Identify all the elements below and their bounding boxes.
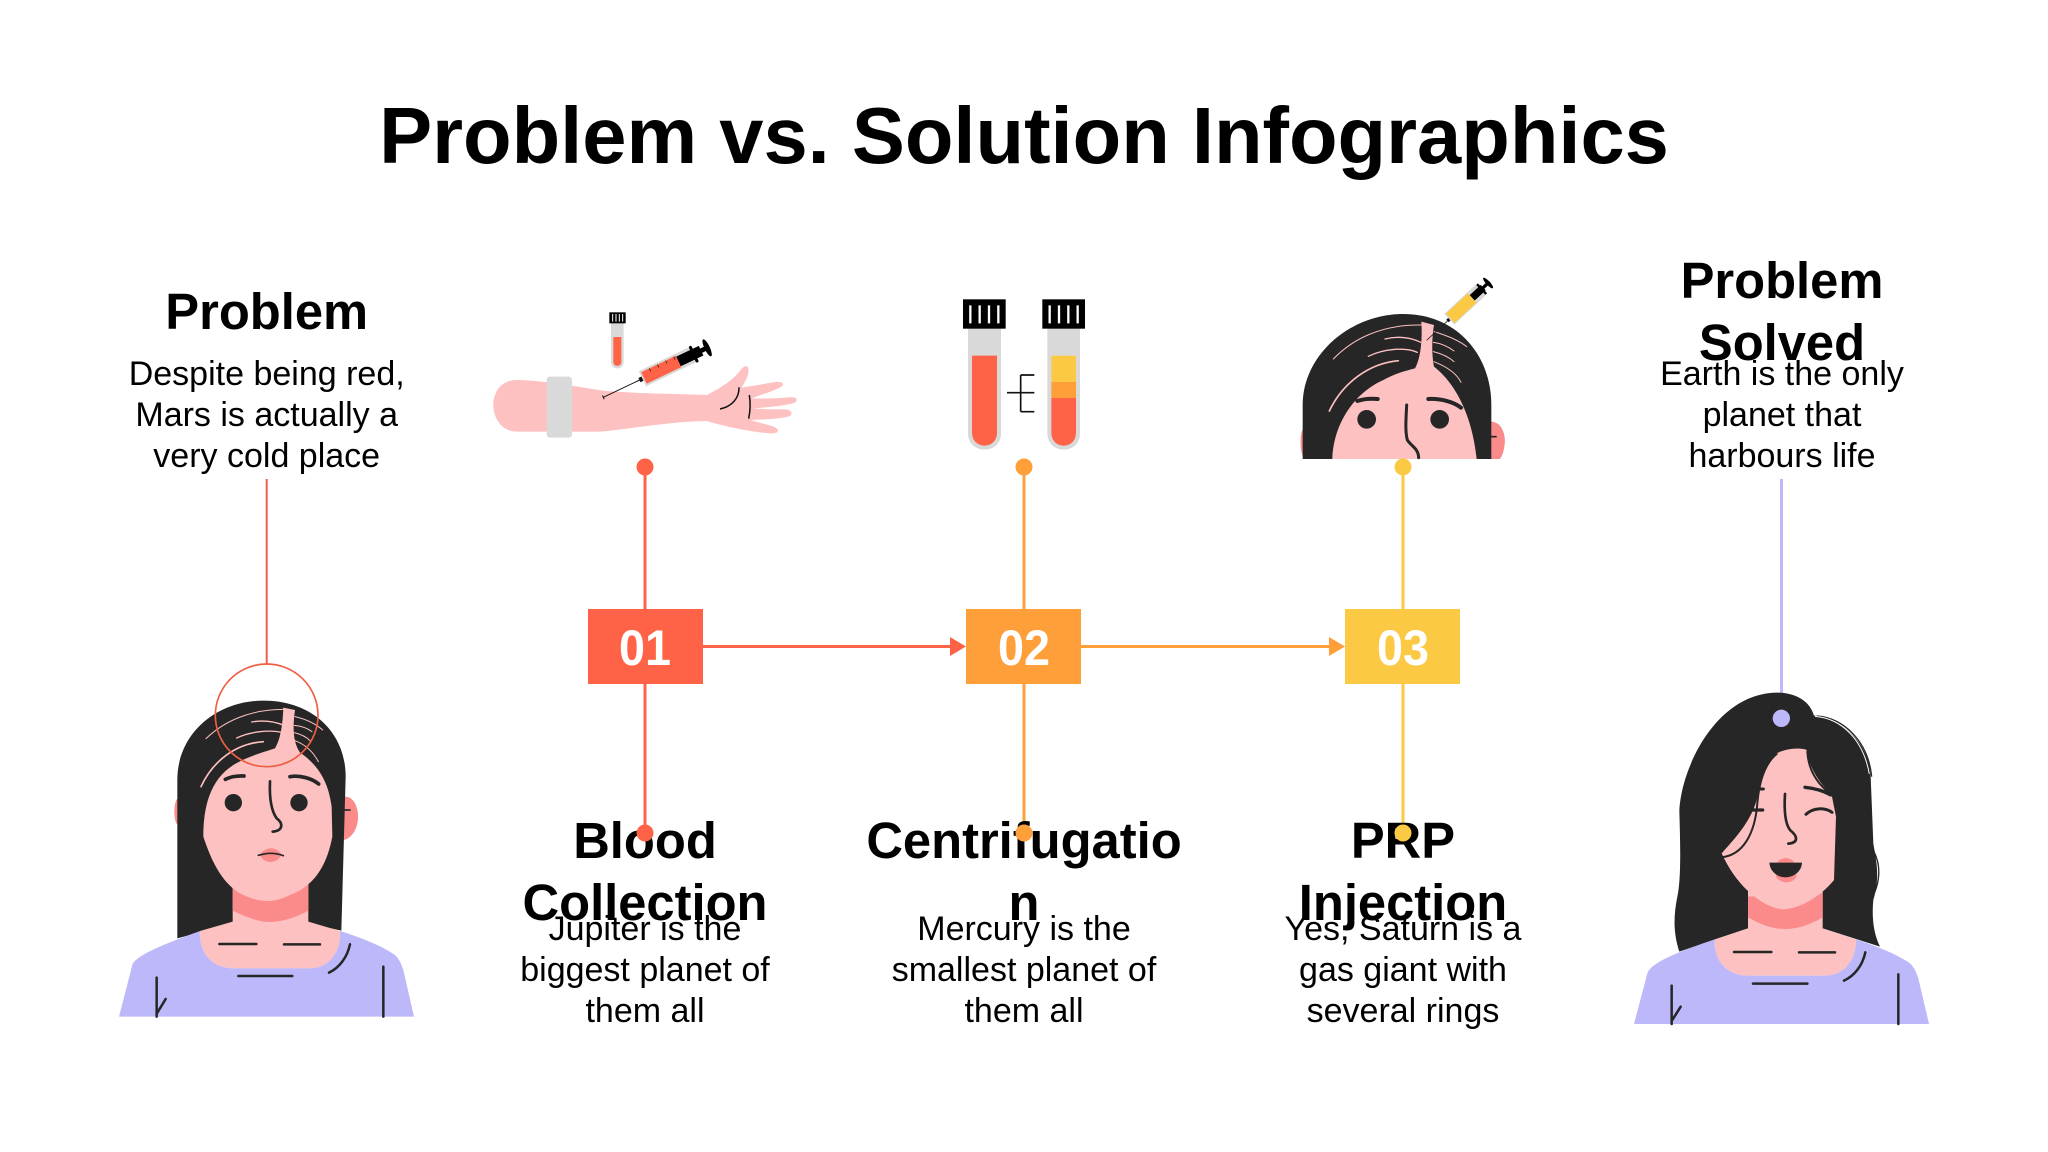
connector: solved line xyxy=(1780,479,1783,718)
syringe xyxy=(1422,276,1495,346)
text block: blood collection: biggest planet of xyxy=(520,951,770,989)
eyebrows xyxy=(1753,784,1763,793)
text block: problem xyxy=(129,283,405,475)
text block: problem solved: Earth is the only xyxy=(1660,355,1904,393)
separation bracket xyxy=(1007,375,1034,412)
eyes xyxy=(1357,410,1376,429)
left tube xyxy=(963,299,1006,450)
text block: problem solved: harbours life xyxy=(1688,437,1876,475)
eyebrows xyxy=(225,776,244,779)
connector: step 1 vertical xyxy=(644,466,646,833)
text block: problem solved xyxy=(1660,252,1904,475)
tourniquet xyxy=(547,377,572,438)
hair outline xyxy=(1817,716,1872,777)
hair strands xyxy=(201,709,323,787)
text block: blood collection: Jupiter is the xyxy=(549,910,741,948)
step badge 02 xyxy=(966,609,1081,684)
syringe xyxy=(599,338,714,406)
text block: centrifugation: Mercury is the xyxy=(917,910,1131,948)
panel: centrifugation illustration xyxy=(963,299,1085,450)
hair xyxy=(1303,314,1491,459)
text block: PRP injection: gas giant with xyxy=(1299,951,1507,989)
step badge 01: 01 xyxy=(619,620,671,676)
dot: step 3 bottom xyxy=(1394,824,1412,842)
collar and shirt lines xyxy=(157,944,383,1017)
panel: blood collection illustration xyxy=(493,312,797,438)
neck shadow xyxy=(233,883,308,922)
right tube xyxy=(1042,299,1085,450)
text block: problem solved: planet that xyxy=(1703,396,1862,434)
test tube xyxy=(609,312,626,368)
mouth xyxy=(260,848,282,862)
arrow: step 2 to step 3 xyxy=(1081,637,1345,656)
mouth xyxy=(1776,858,1797,882)
shirt xyxy=(119,931,414,1017)
text block: problem: Mars is actually a xyxy=(135,396,398,434)
face strands xyxy=(1722,752,1831,857)
text block: centrifugation: Centrifugatio xyxy=(866,812,1182,869)
text block: blood collection xyxy=(520,812,770,1030)
shirt xyxy=(1634,939,1929,1024)
text block: problem: Despite being red, xyxy=(129,355,405,393)
nose xyxy=(270,781,281,832)
nose xyxy=(1785,794,1796,844)
dot: step 2 top xyxy=(1016,458,1032,476)
arm xyxy=(493,366,797,433)
text block: centrifugation: n xyxy=(1009,874,1039,931)
face xyxy=(203,708,332,901)
panel: PRP injection illustration xyxy=(1300,276,1505,459)
left ear xyxy=(1300,428,1304,459)
hair strands xyxy=(1329,325,1467,411)
nose xyxy=(1406,405,1419,458)
left ear xyxy=(174,798,182,825)
panel: solved person illustration xyxy=(1634,693,1929,1024)
face xyxy=(1332,322,1477,459)
text block: blood collection: Blood xyxy=(573,812,717,869)
arrow: step 1 to step 2 xyxy=(702,637,966,656)
step badge 03 xyxy=(1345,609,1460,684)
text block: problem solved: Problem xyxy=(1681,252,1883,309)
text block: blood collection: Collection xyxy=(522,874,768,931)
neck shadow xyxy=(1748,893,1823,929)
connector: problem line xyxy=(266,479,268,664)
eyes xyxy=(225,794,242,811)
right ear xyxy=(1489,422,1505,459)
marker circle xyxy=(215,664,318,767)
solved marker dot xyxy=(1773,710,1790,727)
connector: step 2 vertical xyxy=(1022,466,1026,833)
text block: centrifugation: them all xyxy=(964,992,1084,1030)
text block: problem: Problem xyxy=(165,283,368,340)
dot: step 3 top xyxy=(1394,458,1412,476)
step badge 03: 03 xyxy=(1377,620,1429,676)
closed eyes xyxy=(1746,805,1763,815)
hair xyxy=(177,701,346,938)
right ear xyxy=(343,797,358,840)
step badge 01 xyxy=(588,609,703,684)
text block: PRP injection: several rings xyxy=(1307,992,1499,1030)
palm lines xyxy=(720,387,739,409)
face xyxy=(1722,749,1836,909)
neck and chest xyxy=(1715,890,1856,976)
text block: PRP injection: Yes, Saturn is a xyxy=(1285,910,1522,948)
text block: problem: very cold place xyxy=(153,437,380,475)
collar and shirt lines xyxy=(1672,952,1898,1024)
text block: centrifugation: smallest planet of xyxy=(892,951,1157,989)
hair xyxy=(1675,693,1880,952)
step badge 02: 02 xyxy=(998,620,1050,676)
connector: step 3 vertical xyxy=(1402,466,1404,833)
text block: blood collection: them all xyxy=(585,992,705,1030)
neck and chest xyxy=(200,873,340,968)
dot: step 2 bottom xyxy=(1016,824,1032,842)
text block: PRP injection: Injection xyxy=(1299,874,1507,931)
dot: step 1 top xyxy=(636,458,654,476)
text block: centrifugation xyxy=(866,812,1182,1030)
text block: PRP injection: PRP xyxy=(1351,812,1455,869)
panel: problem person illustration xyxy=(119,664,414,1017)
dot: step 1 bottom xyxy=(636,824,654,842)
text block: problem solved: Solved xyxy=(1699,314,1865,371)
title: Problem vs. Solution Infographics xyxy=(379,91,1669,180)
eyebrows xyxy=(1357,399,1378,401)
text block: PRP injection xyxy=(1285,812,1522,1030)
